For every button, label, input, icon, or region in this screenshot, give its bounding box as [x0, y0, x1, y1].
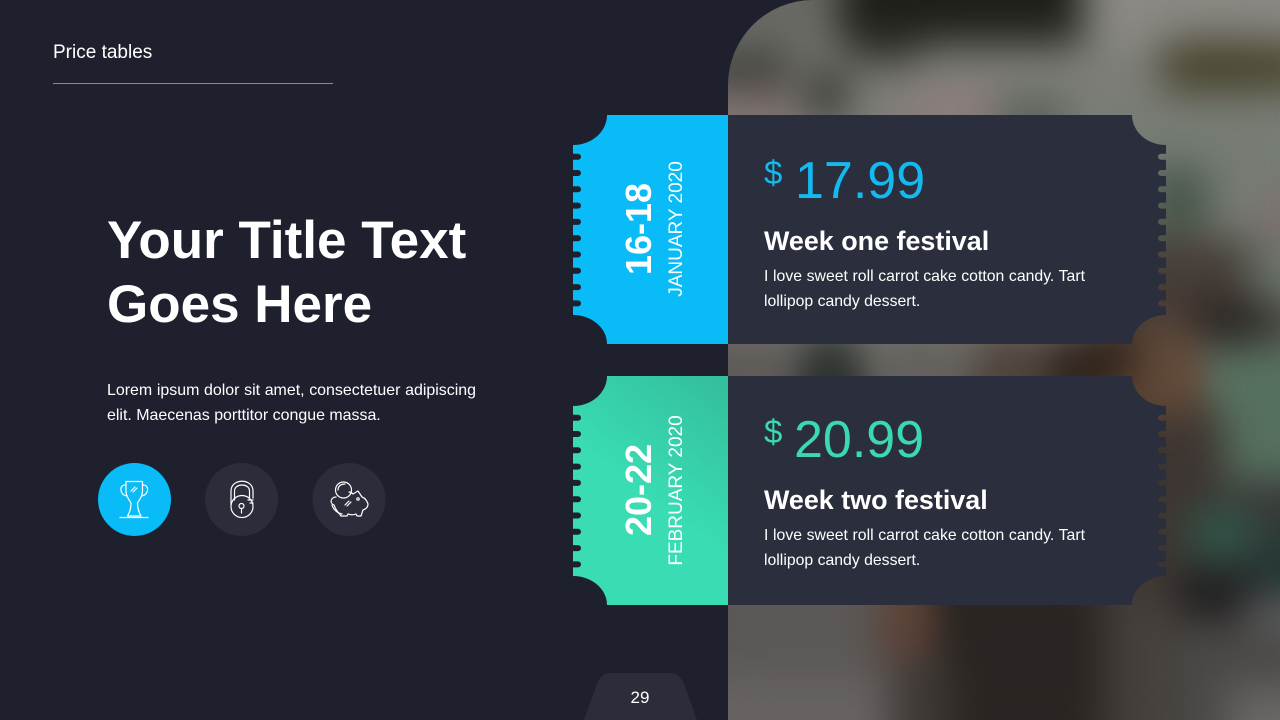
- ticket 2 description: I love sweet roll carrot cake cotton candy. Tart: [764, 526, 1085, 544]
- title: [107, 211, 466, 334]
- ticket 1 description: I love sweet roll carrot cake cotton candy. Tart: [764, 268, 1085, 284]
- title: Goes Here: [107, 275, 372, 334]
- ticket 2 description: lollipop candy dessert.: [764, 552, 920, 568]
- section label: Price tables: Price tables: [53, 42, 152, 63]
- icon: trophy: [98, 463, 171, 536]
- ticket 2 graphics: [573, 376, 1166, 605]
- ticket 2 date stub: [573, 376, 728, 605]
- intro paragraph: elit. Maecenas porttitor congue massa.: [107, 407, 381, 424]
- ticket 1 date stub: 16-18: [618, 183, 659, 275]
- intro paragraph: [107, 382, 476, 424]
- ticket 1: week one: [573, 115, 1166, 344]
- intro paragraph: Lorem ipsum dolor sit amet, consectetuer adipiscing: [107, 382, 476, 399]
- icon: piggy bank: [312, 463, 386, 536]
- page number tab: [584, 673, 697, 720]
- icon: padlock: [205, 463, 278, 536]
- ticket 1 description: [764, 268, 1085, 310]
- ticket 2 price card: [728, 376, 1166, 605]
- ticket 1 graphics: [573, 115, 1166, 344]
- ticket 2 price: $: [764, 413, 782, 450]
- ticket 2 description: [764, 526, 1085, 568]
- title: Your Title Text: [107, 211, 466, 270]
- page number tab: 29: [631, 688, 649, 707]
- ticket 2 price: 20.99: [794, 411, 924, 469]
- background photo (blurred): [728, 0, 1280, 720]
- icon row: [98, 463, 386, 536]
- ticket 2: week two: [573, 376, 1166, 605]
- ticket 2 heading: Week two festival: [764, 485, 988, 515]
- ticket 2 date stub: 20-22: [618, 444, 659, 536]
- ticket 1 heading: Week one festival: [764, 226, 989, 256]
- ticket 1 date stub: JANUARY 2020: [666, 161, 687, 297]
- ticket 1 price: $: [764, 154, 782, 191]
- ticket 2 date stub: FEBRUARY 2020: [666, 415, 687, 566]
- ticket 1 description: lollipop candy dessert.: [764, 292, 920, 310]
- ticket 1 price card: [728, 115, 1166, 344]
- ticket 1 date stub: [573, 115, 728, 344]
- ticket 1 price: 17.99: [795, 152, 925, 210]
